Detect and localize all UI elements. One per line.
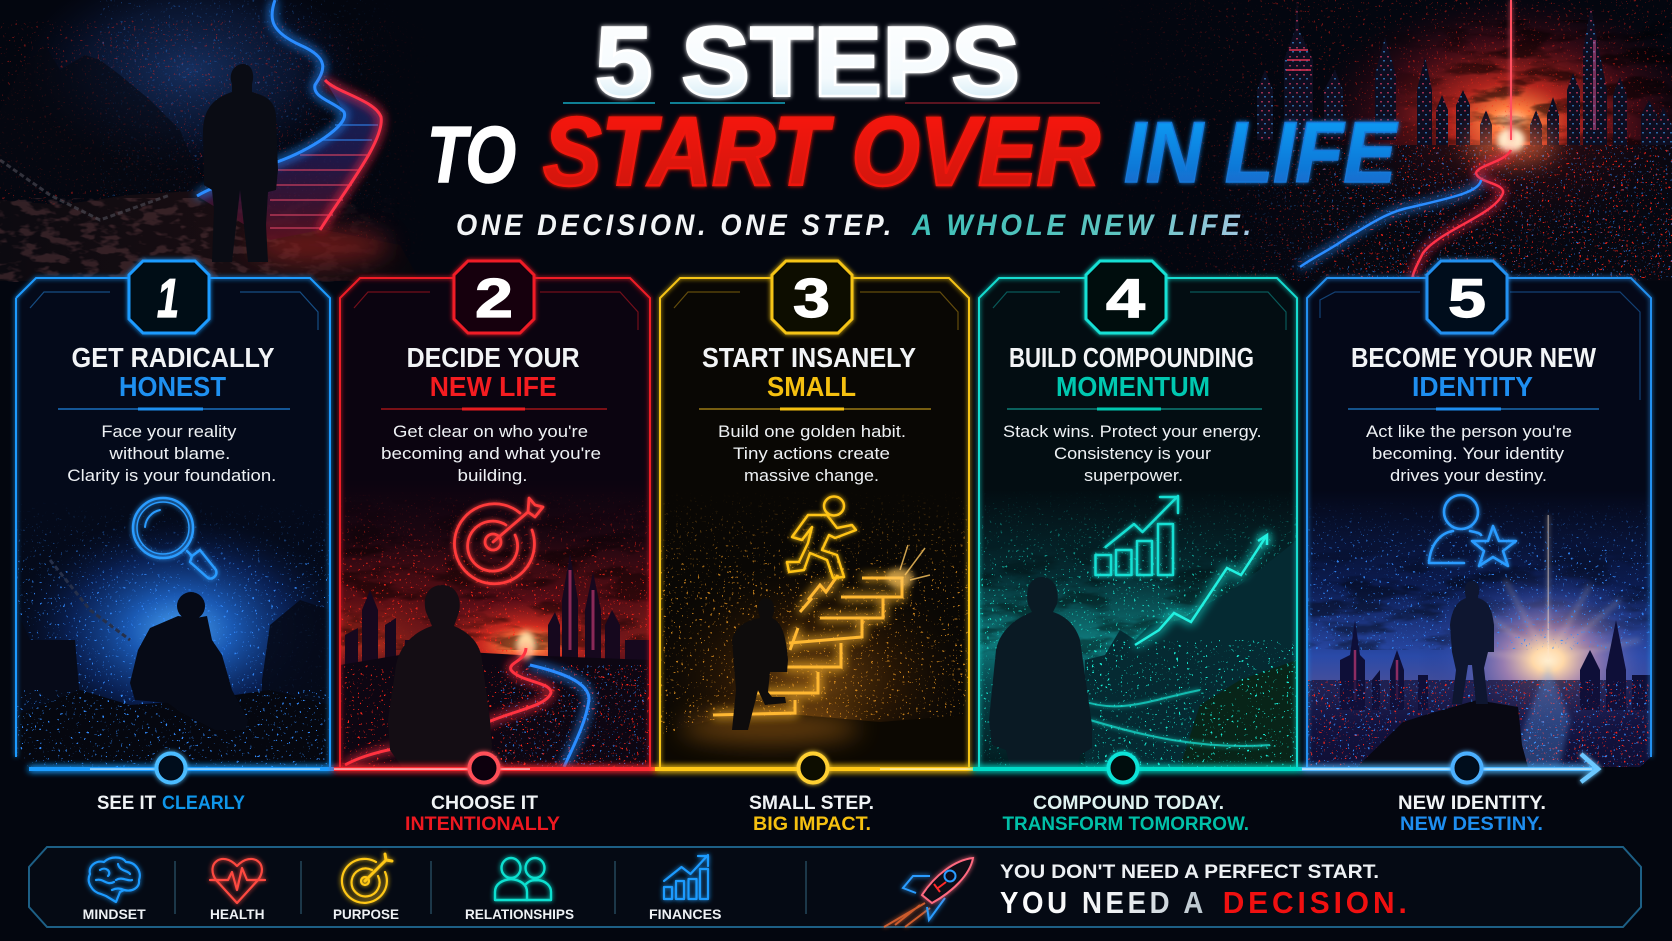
item: purpose: PURPOSE (333, 907, 399, 922)
badge: number 3: 3 (793, 267, 830, 329)
caption: step 3: SMALL STEP. (749, 793, 874, 814)
text block: superpower. (1084, 466, 1183, 485)
title word: to: TO (427, 110, 516, 199)
caption: step 4: TRANSFORM TOMORROW. (1002, 814, 1249, 835)
caption: step 4: COMPOUND TODAY. (1033, 793, 1224, 814)
illustration: glowing stairs (713, 575, 902, 715)
caption: step 2: CHOOSE IT (431, 793, 538, 814)
caption: step 2: INTENTIONALLY (405, 814, 560, 835)
item: finances: FINANCES (649, 907, 722, 922)
text block (1003, 422, 1262, 485)
caption: step 1 (97, 793, 245, 814)
call to action text (1000, 861, 1411, 920)
icon: running figure (787, 496, 856, 578)
title (427, 6, 1398, 206)
text block: without blame. (108, 444, 230, 463)
subtitle (456, 209, 1255, 242)
figure: man facing the city (388, 585, 492, 767)
text block: becoming and what you're (381, 444, 601, 463)
icon: rocket (884, 858, 973, 927)
heading: HONEST (119, 371, 226, 402)
text block: Act like the person you're (1366, 422, 1572, 441)
text block: Get clear on who you're (393, 422, 588, 441)
title words: in life: IN LIFE (1124, 105, 1398, 201)
heading: SMALL (767, 371, 856, 402)
caption: step 1: SEE IT (97, 793, 156, 814)
scene: glowing city skyline (1100, 0, 1672, 281)
figure: man sitting with head in hand (130, 592, 248, 730)
figure: man on the ledge (1450, 581, 1494, 704)
text block: Consistency is your (1054, 444, 1211, 463)
caption: step 5 (1398, 793, 1546, 835)
item: purpose (333, 854, 399, 922)
text block: Tiny actions create (733, 444, 890, 463)
heading (1351, 342, 1596, 402)
heading (407, 342, 580, 402)
text block (718, 422, 906, 485)
heading: MOMENTUM (1056, 371, 1210, 402)
heading (1009, 342, 1254, 402)
figure: man climbing (732, 598, 788, 730)
badge: number 4: 4 (1106, 267, 1146, 329)
node: step 3 (798, 754, 828, 782)
text block (381, 422, 601, 485)
timeline with arrow (29, 754, 1598, 782)
caption: step 1: CLEARLY (162, 793, 245, 814)
badge: number 2 (454, 261, 534, 333)
caption: step 5: NEW DESTINY. (1400, 814, 1543, 835)
node: step 4 (1108, 754, 1138, 782)
icon: growth chart (1096, 496, 1178, 575)
caption: step 2 (405, 793, 560, 835)
heading: NEW LIFE (430, 371, 557, 402)
call to action text: YOU NEED A (1000, 886, 1207, 920)
caption: step 4 (1002, 793, 1249, 835)
illustration: rocky ledge (1357, 700, 1528, 767)
item: mindset: MINDSET (83, 907, 146, 922)
arrowhead (1581, 754, 1598, 782)
badge: number 3 (772, 261, 852, 333)
text block: massive change. (744, 466, 879, 485)
icon: person with star (1429, 495, 1516, 566)
panel: step 4 (979, 261, 1297, 767)
title line one: 5 STEPS (595, 6, 1020, 117)
text block: becoming. Your identity (1372, 444, 1565, 463)
badge: number 5 (1427, 261, 1507, 333)
badge: number 2: 2 (475, 267, 513, 329)
badge: number 1: 1 (157, 267, 179, 329)
illustration: city skyline (1340, 620, 1651, 710)
panel: life areas and call to action (29, 847, 1641, 927)
scene: man at start of glowing road (0, 0, 430, 282)
heading: START INSANELY (702, 342, 916, 373)
text block: building. (458, 466, 528, 485)
item: relationships (465, 858, 574, 922)
call to action text: YOU DON'T NEED A PERFECT START. (1000, 861, 1379, 883)
icon: target with arrow (454, 498, 543, 584)
subtitle: ONE DECISION. ONE STEP. (456, 209, 895, 242)
caption: step 3: BIG IMPACT. (753, 814, 871, 835)
text block: Build one golden habit. (718, 422, 906, 441)
panel: step 2 (340, 261, 676, 767)
caption: step 3 (749, 793, 874, 835)
figure: man looking at growth (989, 577, 1092, 767)
badge: number 5: 5 (1448, 267, 1486, 329)
text block: Face your reality (101, 422, 237, 441)
call to action text: DECISION. (1223, 886, 1411, 920)
panel: step 5 (1307, 261, 1672, 767)
heading: BUILD COMPOUNDING (1009, 342, 1254, 373)
text block (1366, 422, 1572, 485)
item: health (210, 859, 265, 922)
heading (72, 342, 274, 402)
title words: start over: START OVER (543, 97, 1100, 206)
item: relationships: RELATIONSHIPS (465, 907, 574, 922)
caption: step 5: NEW IDENTITY. (1398, 793, 1546, 814)
heading: GET RADICALLY (72, 342, 274, 373)
text block: Stack wins. Protect your energy. (1003, 422, 1262, 441)
node: step 2 (470, 754, 498, 782)
node: step 1 (156, 754, 186, 782)
item: mindset (83, 858, 146, 922)
text block: Clarity is your foundation. (67, 466, 276, 485)
illustration: mountains (1085, 540, 1297, 767)
badge: number 1 (129, 261, 209, 333)
heading (702, 342, 916, 402)
item: health: HEALTH (210, 907, 265, 922)
text block: drives your destiny. (1390, 466, 1547, 485)
item: finances (649, 855, 722, 922)
panel: step 1 (11, 261, 351, 767)
badge: number 4 (1086, 261, 1166, 333)
heading: IDENTITY (1412, 371, 1533, 402)
heading: BECOME YOUR NEW (1351, 342, 1596, 373)
text block (67, 422, 276, 485)
panel: step 3 (655, 256, 974, 767)
subtitle: A WHOLE NEW LIFE. (911, 209, 1255, 242)
illustration: city skyline (345, 553, 650, 670)
node: step 5 (1452, 754, 1482, 782)
icon: magnifying glass (133, 498, 216, 579)
heading: DECIDE YOUR (407, 342, 580, 373)
illustration: rising glowing line (1135, 535, 1267, 645)
